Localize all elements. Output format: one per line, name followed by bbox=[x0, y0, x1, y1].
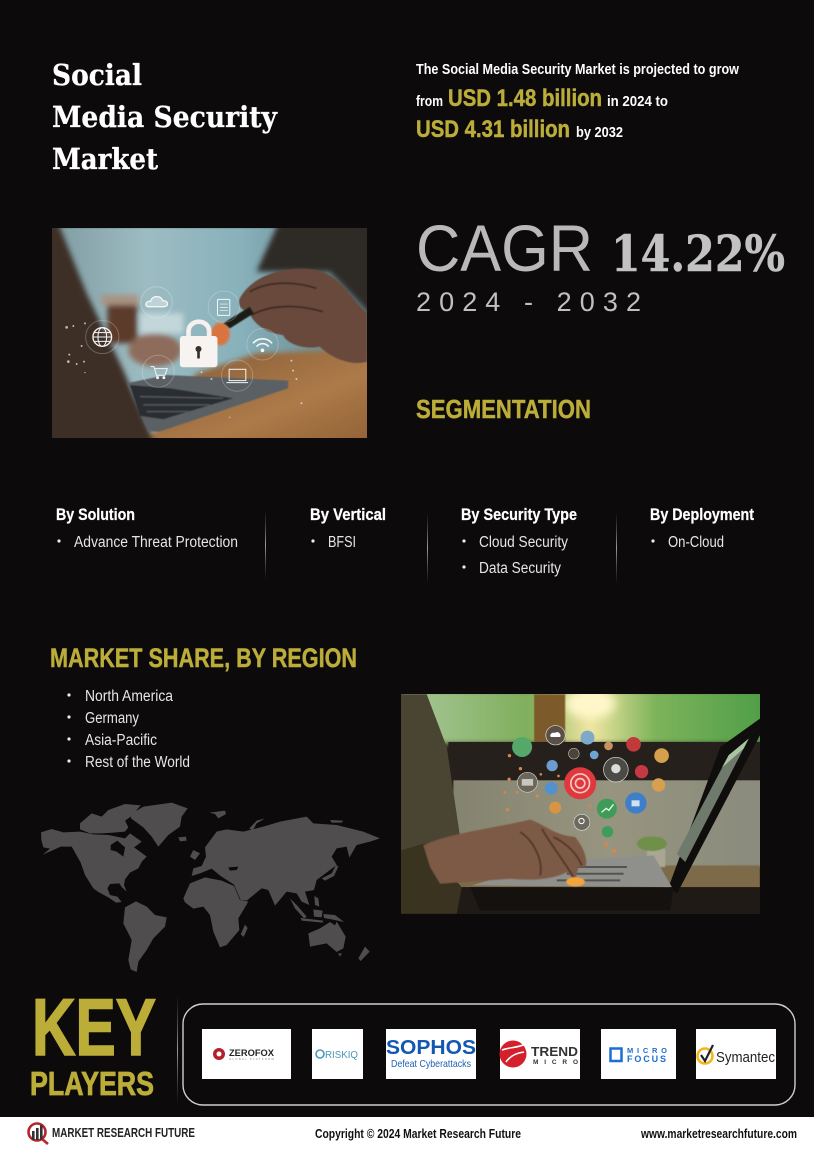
footer logo bbox=[28, 1124, 195, 1144]
hand bbox=[423, 820, 586, 884]
padlock bbox=[180, 322, 217, 367]
key players heading: PLAYERS bbox=[30, 1065, 154, 1102]
title: Social bbox=[52, 58, 142, 92]
photo: laptop with security padlock bbox=[52, 228, 367, 438]
segment: by solution: Advance Threat Protection bbox=[74, 534, 238, 551]
logo: RiskIQ: RISKIQ bbox=[325, 1050, 358, 1061]
segment: by solution bbox=[56, 505, 238, 551]
logo: ZeroFox bbox=[202, 1029, 291, 1079]
hand holding pen bbox=[223, 269, 367, 363]
key players heading bbox=[30, 983, 156, 1102]
region list: Asia-Pacific bbox=[85, 732, 157, 749]
segment: by security type: By Security Type bbox=[461, 505, 577, 524]
segment: by deployment bbox=[650, 505, 754, 551]
CAGR figure bbox=[416, 211, 785, 317]
segment: by vertical bbox=[310, 505, 386, 551]
segment: by security type: Cloud Security bbox=[479, 534, 568, 551]
market projection text: The Social Media Security Market is projected to grow bbox=[416, 62, 740, 78]
title: Media Security bbox=[52, 100, 278, 134]
region list bbox=[67, 688, 190, 771]
market projection text: USD 4.31 billion bbox=[416, 116, 570, 143]
market projection text: by 2032 bbox=[576, 125, 623, 141]
logo: Trend Micro: TREND bbox=[531, 1044, 578, 1059]
logo: Symantec: Symantec bbox=[716, 1049, 775, 1066]
copyright: Copyright © 2024 Market Research Future bbox=[315, 1127, 521, 1141]
market share heading: MARKET SHARE, BY REGION bbox=[50, 643, 357, 673]
market projection text: USD 1.48 billion bbox=[448, 85, 602, 112]
logo: Micro Focus: FOCUS bbox=[627, 1054, 666, 1064]
logo: Micro Focus: MICRO bbox=[627, 1046, 667, 1055]
security icons bbox=[86, 287, 278, 391]
region list: Rest of the World bbox=[85, 754, 190, 771]
segmentation heading: SEGMENTATION bbox=[416, 394, 591, 424]
key players panel bbox=[183, 1004, 795, 1105]
segment: by security type bbox=[461, 505, 577, 577]
photo: hands on laptop with social media bubbles bbox=[401, 694, 760, 914]
glow bbox=[211, 323, 230, 345]
title bbox=[52, 58, 278, 176]
logo: Sophos: SOPHOS bbox=[386, 1037, 476, 1059]
key players heading: KEY bbox=[32, 983, 156, 1073]
person bbox=[401, 694, 460, 850]
segment: by security type: Data Security bbox=[479, 560, 561, 577]
CAGR figure: 14.22% bbox=[611, 224, 785, 283]
market projection text: from bbox=[416, 94, 443, 110]
CAGR figure: 2024 - 2032 bbox=[416, 287, 641, 317]
logo: Trend Micro bbox=[500, 1029, 580, 1079]
region list: North America bbox=[85, 688, 173, 705]
segment: by vertical: By Vertical bbox=[310, 505, 386, 524]
footer logo: MARKET RESEARCH FUTURE bbox=[52, 1126, 195, 1140]
CAGR figure: CAGR bbox=[416, 211, 593, 285]
title: Market bbox=[52, 142, 159, 176]
market projection text: in 2024 to bbox=[607, 94, 668, 110]
logo: Sophos: Defeat Cyberattacks bbox=[391, 1058, 471, 1070]
segment: by deployment: By Deployment bbox=[650, 505, 754, 524]
laptop base bbox=[127, 375, 288, 432]
laptop bbox=[470, 719, 760, 910]
logo: ZeroFox: GLOBAL PLATFORM bbox=[229, 1057, 274, 1061]
logo: Trend Micro: MICRO bbox=[533, 1059, 578, 1066]
region list: Germany bbox=[85, 710, 139, 727]
plant bbox=[637, 836, 667, 867]
market projection text bbox=[416, 62, 740, 143]
logo: Micro Focus bbox=[601, 1029, 676, 1079]
segment: by vertical: BFSI bbox=[328, 534, 356, 551]
logo: RiskIQ bbox=[312, 1029, 363, 1079]
social media bubbles bbox=[503, 726, 669, 853]
footer bbox=[0, 1117, 814, 1150]
world map bbox=[41, 802, 380, 972]
logo: Symantec bbox=[696, 1029, 776, 1079]
logo: ZeroFox: ZEROFOX bbox=[229, 1048, 274, 1058]
segment: by deployment: On-Cloud bbox=[668, 534, 724, 551]
segment: by solution: By Solution bbox=[56, 505, 135, 524]
network dots bbox=[65, 322, 302, 418]
logo: Sophos bbox=[386, 1029, 476, 1079]
